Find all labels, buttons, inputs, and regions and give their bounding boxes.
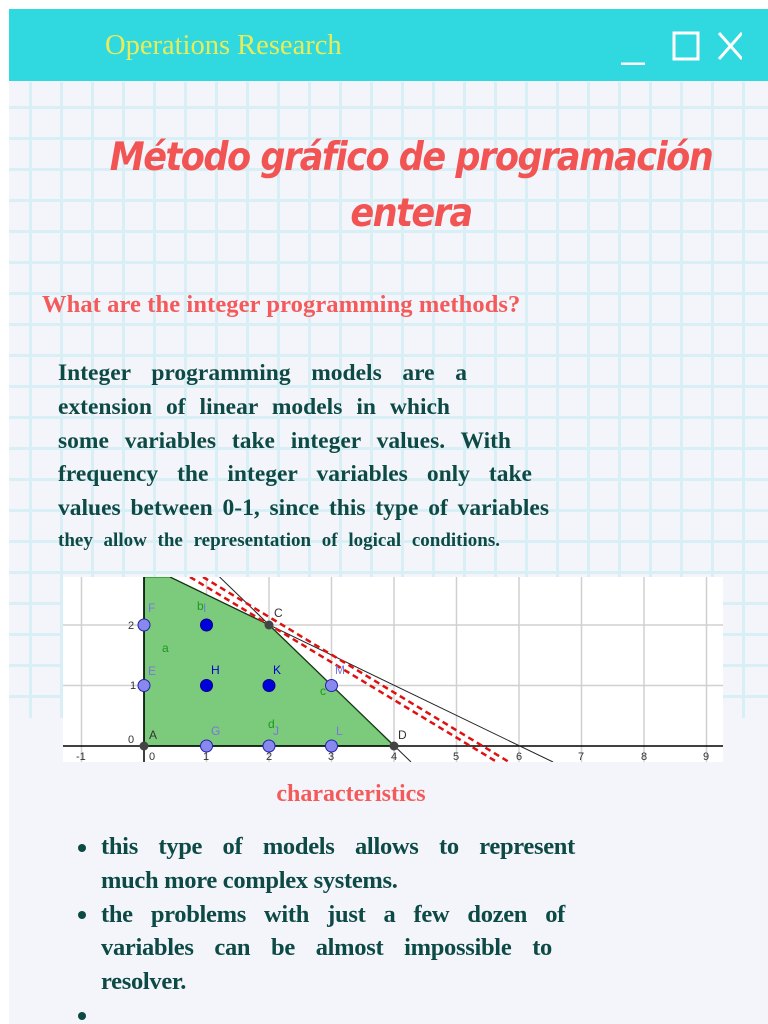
chart: integer programming graphical solution: G [211, 724, 220, 738]
bullet list: variables can be almost impossible to [101, 934, 552, 961]
chart: integer programming graphical solution: d [268, 717, 275, 731]
chart: integer programming graphical solution: a [162, 641, 169, 655]
chart: integer programming graphical solution: K [273, 663, 281, 677]
chart: integer programming graphical solution: F [148, 601, 155, 615]
bullet list: much more complex systems. [101, 867, 398, 894]
chart: integer programming graphical solution: I [203, 601, 206, 615]
chart: integer programming graphical solution: 2 [128, 620, 134, 632]
bullet list [78, 833, 576, 1020]
feasible region [144, 577, 394, 746]
chart: integer programming graphical solution: D [398, 728, 407, 742]
header title: Operations Research [105, 30, 342, 61]
chart: integer programming graphical solution [63, 577, 723, 762]
intro text block: extension of linear models in which [58, 394, 450, 420]
chart: integer programming graphical solution: H [211, 663, 220, 677]
question heading: What are the integer programming methods? [42, 291, 520, 318]
chart: integer programming graphical solution: L [336, 724, 343, 738]
window controls icons [621, 32, 742, 65]
intro text block: frequency the integer variables only take [58, 461, 532, 487]
chart: integer programming graphical solution: b [197, 599, 204, 613]
chart: integer programming graphical solution: 0 [128, 734, 134, 746]
intro text block: some variables take integer values. With [58, 428, 511, 454]
intro text block [58, 360, 549, 551]
intro text block: values between 0-1, since this type of variables [58, 495, 549, 521]
title [110, 135, 712, 236]
bullet list: this type of models allows to represent [101, 833, 575, 860]
characteristics heading: characteristics [276, 781, 426, 807]
header bar [9, 9, 768, 81]
chart: integer programming graphical solution: C [274, 606, 283, 620]
bullet list: resolver. [101, 968, 186, 995]
intro text block: Integer programming models are a [58, 360, 467, 386]
bullet list: the problems with just a few dozen of [101, 901, 565, 928]
chart: integer programming graphical solution: J [273, 724, 279, 738]
chart: integer programming graphical solution: E [148, 664, 156, 678]
chart: integer programming graphical solution: 1 [130, 680, 136, 692]
chart: integer programming graphical solution: A [149, 728, 157, 742]
title: Método gráfico de programación [110, 135, 712, 180]
intro text block: they allow the representation of logical conditions. [58, 530, 500, 551]
title: entera [350, 191, 472, 236]
chart: integer programming graphical solution: c [320, 684, 326, 698]
chart: integer programming graphical solution: M [335, 663, 345, 677]
